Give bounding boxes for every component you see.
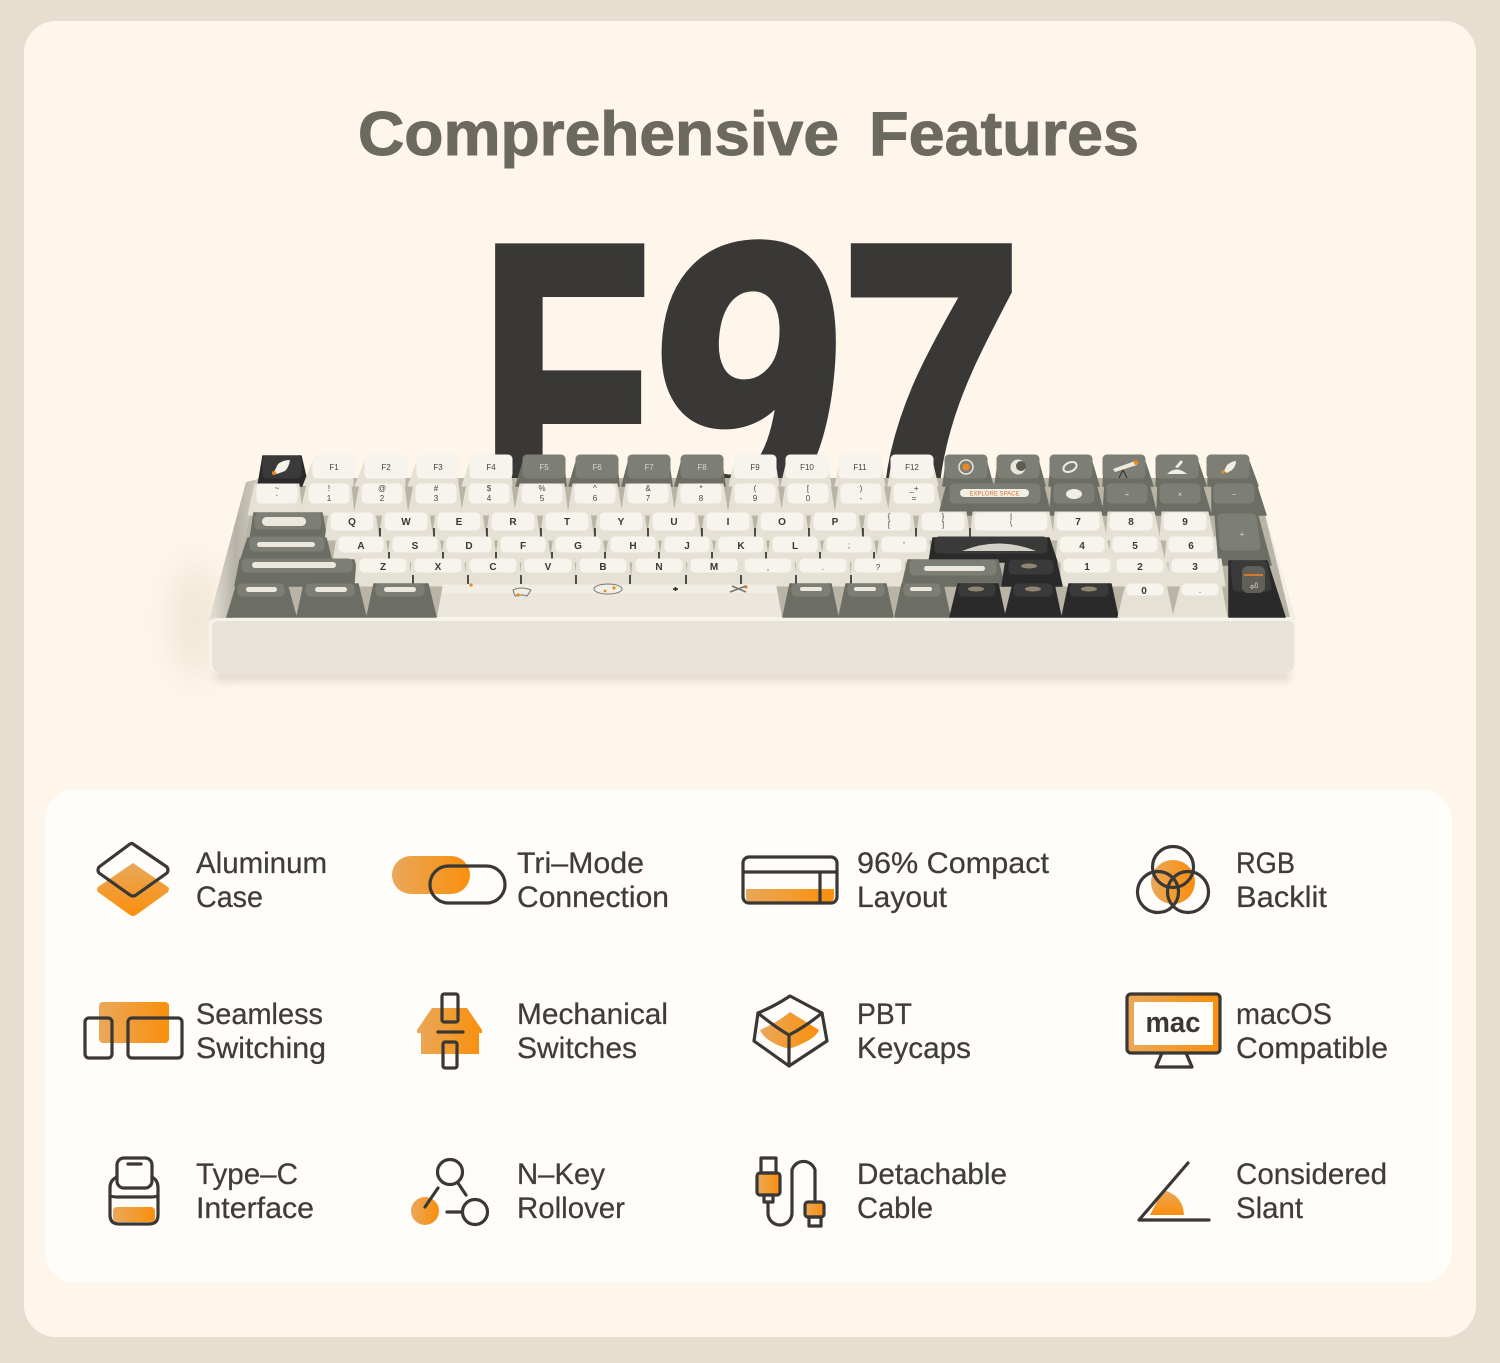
icon: overlapping circles — [1138, 846, 1208, 912]
label: Type–C — [196, 1158, 298, 1191]
label: Case — [196, 881, 263, 914]
function key row: F5 — [539, 463, 549, 472]
label: Tri–Mode — [517, 847, 644, 880]
model name F97: 9 — [627, 165, 865, 602]
label — [1236, 998, 1388, 1065]
icon: ring planet keycap — [1062, 460, 1078, 474]
bottom key row: . — [1199, 586, 1201, 595]
feature: Tri-Mode Connection — [392, 847, 669, 914]
label: macOS — [1236, 998, 1332, 1031]
number key row — [248, 484, 1266, 515]
label: PBT — [857, 998, 912, 1031]
icon: moon keycap — [1010, 460, 1026, 474]
label: Backlit — [1236, 881, 1327, 914]
label — [517, 1158, 625, 1225]
label: Slant — [1236, 1192, 1303, 1225]
QWERTY key row: 789 — [1075, 517, 1188, 528]
label — [1236, 847, 1327, 914]
number key row: ÷×− — [1125, 490, 1237, 499]
function key row: F4 — [486, 463, 496, 472]
function key row: F2 — [381, 463, 391, 472]
label: Connection — [517, 881, 669, 914]
model name F97: F — [480, 165, 651, 602]
function key row — [258, 456, 1258, 486]
feature: macOS Compatible — [1127, 994, 1388, 1067]
function key row: F11 — [853, 463, 867, 472]
ZXCV key row — [235, 559, 1285, 617]
key: left shift pill — [252, 562, 336, 568]
label: Layout — [857, 881, 947, 914]
QWERTY key row: QWERTYUIOP — [348, 517, 839, 528]
feature: Mechanical Switches — [417, 994, 668, 1068]
function key row: F7 — [644, 463, 654, 472]
bottom key row — [227, 584, 1227, 617]
label — [196, 847, 327, 914]
label: Detachable — [857, 1158, 1007, 1191]
case side walls — [209, 478, 1296, 620]
label — [857, 1158, 1007, 1225]
label — [517, 847, 669, 914]
keyboard — [171, 456, 1296, 682]
key: numpad enter — [1229, 561, 1285, 617]
label: RGB — [1236, 847, 1295, 880]
space bar with illustrations — [437, 583, 782, 617]
icon: layered diamond — [97, 844, 169, 916]
function key row: F9 — [750, 463, 760, 472]
key: caps pill — [257, 542, 315, 547]
icon: rover keycap — [1167, 460, 1187, 474]
function key row: F8 — [697, 463, 707, 472]
icon: cable — [757, 1158, 824, 1226]
title: Comprehensive — [358, 100, 839, 169]
model name F97: 7 — [841, 164, 1022, 602]
label: Interface — [196, 1192, 314, 1225]
title: Features — [869, 100, 1139, 169]
label: 96% Compact — [857, 847, 1049, 880]
label: N–Key — [517, 1158, 605, 1191]
feature: Seamless Switching — [85, 998, 326, 1065]
icon: slant angle — [1139, 1163, 1209, 1220]
icon: type-c connector — [110, 1158, 158, 1224]
label — [857, 847, 1049, 914]
QWERTY key row: {}| — [888, 512, 1012, 521]
label — [196, 998, 326, 1065]
feature: Detachable Cable — [757, 1158, 1007, 1226]
label: Keycaps — [857, 1032, 971, 1065]
key: explore space — [960, 489, 1029, 497]
ASDF key row — [240, 513, 1271, 565]
label: Switches — [517, 1032, 637, 1065]
key plate — [228, 478, 1290, 617]
label: Mechanical — [517, 998, 668, 1031]
icon: mac monitor — [1127, 994, 1220, 1067]
feature: RGB Backlit — [1138, 846, 1327, 914]
ASDF key row: ;' — [848, 541, 905, 550]
icon: planet keycap — [959, 460, 973, 474]
icon: mechanical switch — [417, 994, 482, 1068]
function key row: F3 — [433, 463, 443, 472]
QWERTY key row: []\ — [888, 520, 1013, 529]
number key row: `1234567890-= — [276, 494, 917, 503]
feature: 96% Compact Layout — [743, 847, 1049, 914]
label — [196, 1158, 314, 1225]
case front — [209, 618, 1296, 674]
icon: toggle pills — [392, 856, 505, 903]
title — [358, 100, 1139, 169]
key: numpad enter: ⏎ — [1250, 582, 1258, 593]
key: orange pill — [1066, 489, 1082, 499]
feature: Type-C Interface — [110, 1158, 314, 1225]
label — [1236, 1158, 1387, 1225]
label: Aluminum — [196, 847, 327, 880]
icon: keycap — [754, 996, 827, 1066]
feature: N-Key Rollover — [411, 1158, 625, 1225]
function key row: F6 — [592, 463, 602, 472]
model name F97 — [495, 239, 1012, 478]
key: explore space: EXPLORE SPACE — [970, 491, 1020, 497]
function key row: F10 — [800, 463, 814, 472]
label: Cable — [857, 1192, 933, 1225]
key: tab pill — [262, 517, 306, 526]
key: plus — [1215, 513, 1271, 565]
key: plus: + — [1240, 530, 1245, 539]
QWERTY key row — [250, 512, 1214, 540]
function key row: F1 — [329, 463, 339, 472]
keyboard shadow — [171, 562, 1290, 682]
ZXCV key row: ,.? — [767, 563, 881, 572]
function key row: F12 — [905, 463, 919, 472]
key: right shift — [902, 560, 1004, 586]
ASDF key row: ASDFGHJKL456 — [357, 541, 1194, 552]
label: Compatible — [1236, 1032, 1388, 1065]
icon: compact layout — [743, 857, 837, 903]
label — [857, 998, 971, 1065]
icon: small rocket keycap — [1221, 461, 1236, 474]
icon: device switching — [85, 1002, 182, 1058]
icon: telescope keycap — [1113, 460, 1139, 478]
feature: PBT Keycaps — [754, 996, 971, 1066]
icon: rocket keycap — [272, 460, 290, 475]
feature: Aluminum Case — [97, 844, 327, 916]
panel: features — [45, 790, 1452, 1282]
label: Switching — [196, 1032, 326, 1065]
key: up arrow — [1002, 560, 1062, 586]
number key row: ~!@#$%^&*([)_+ — [275, 484, 919, 493]
ZXCV key row: ZXCVBNM123 — [380, 562, 1198, 573]
label: Rollover — [517, 1192, 625, 1225]
bottom key row: 0 — [1141, 586, 1147, 597]
label: Seamless — [196, 998, 323, 1031]
icon: mac monitor: mac — [1146, 1007, 1200, 1039]
icon: connected nodes — [411, 1160, 488, 1225]
enter key with moon art — [929, 538, 1057, 562]
label — [517, 998, 668, 1065]
feature: Considered Slant — [1139, 1158, 1387, 1225]
label: Considered — [1236, 1158, 1387, 1191]
